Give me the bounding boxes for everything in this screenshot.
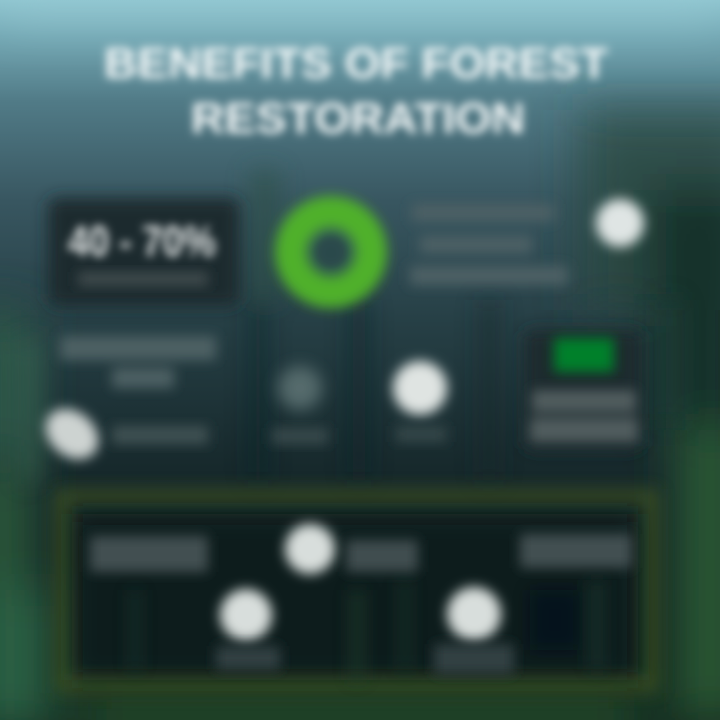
text block: left middle (60, 336, 216, 388)
icon: bottom left circle (220, 589, 272, 641)
title: RESTORATION (191, 94, 525, 143)
donut description text (410, 204, 568, 285)
bottom text right (520, 534, 632, 568)
bottom left label (216, 646, 280, 670)
icon: bottom center circle (285, 524, 335, 574)
panel: bottom framed box (62, 496, 652, 686)
right card text (530, 390, 638, 442)
icon: middle faded (278, 366, 322, 410)
icon: bottom right circle (447, 587, 501, 641)
panel: top-left stat card (48, 198, 240, 306)
bottom right label (434, 644, 514, 674)
stat numbers: 40 - 70% (68, 217, 216, 266)
bottom text left (90, 536, 208, 572)
title: BENEFITS OF FOREST (104, 39, 608, 88)
title (104, 39, 608, 143)
icon: center circle (393, 361, 447, 415)
green badge (554, 338, 614, 372)
panel: right card (524, 330, 642, 450)
center icon label (396, 426, 446, 442)
icon: left leaf (36, 399, 108, 469)
donut chart (291, 212, 371, 292)
stat caption (78, 272, 208, 286)
bottom center label (346, 540, 418, 572)
icon: top-right circle (596, 199, 644, 247)
left icon label (112, 426, 208, 444)
middle faded label (272, 428, 328, 444)
